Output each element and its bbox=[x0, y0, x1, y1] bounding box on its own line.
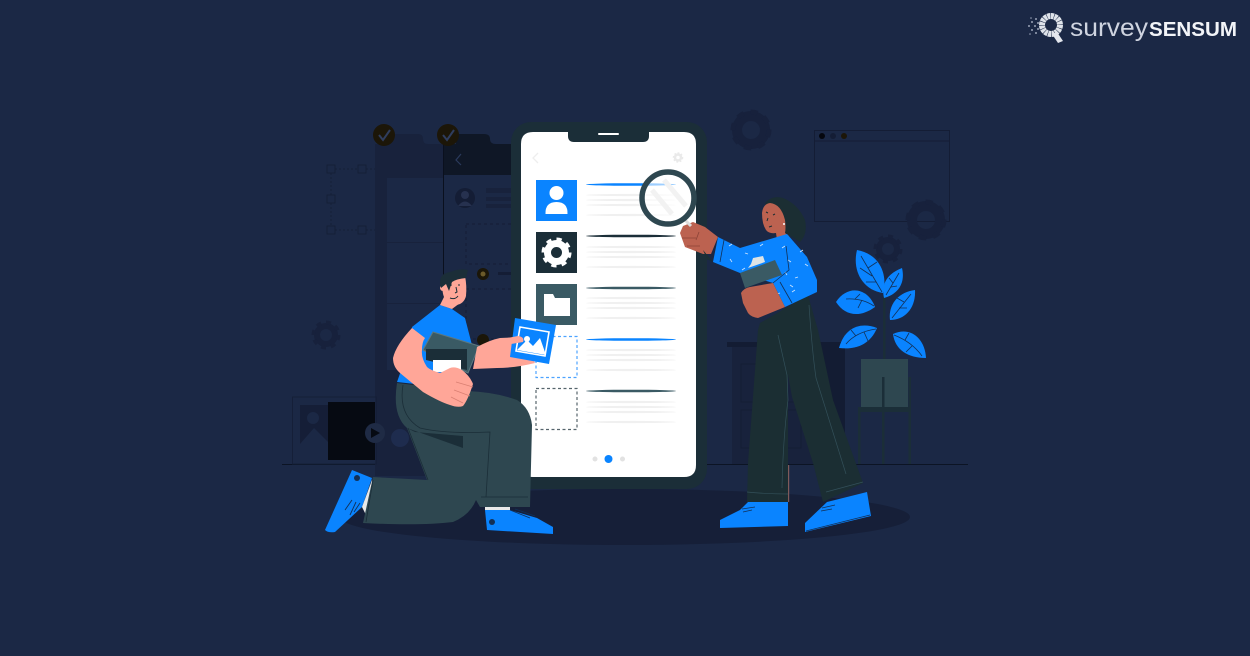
ear bbox=[440, 285, 446, 291]
trousers bbox=[747, 295, 863, 502]
background desk bbox=[727, 342, 845, 464]
list row 3 bbox=[586, 287, 676, 319]
background gear small bbox=[876, 236, 900, 262]
photo card bbox=[510, 318, 556, 364]
back chevron bbox=[533, 153, 538, 163]
shoe details bbox=[345, 500, 535, 518]
list row 5 bbox=[586, 390, 676, 423]
background gear right bbox=[908, 202, 944, 238]
logo mark bbox=[1028, 16, 1063, 43]
neck bbox=[440, 295, 460, 309]
hair bbox=[765, 197, 806, 242]
shoe detail bbox=[742, 505, 870, 531]
raised hand bbox=[680, 222, 718, 254]
t-shirt bbox=[397, 305, 472, 384]
head bbox=[442, 276, 466, 305]
plant bbox=[836, 250, 926, 360]
plant pot and stand bbox=[858, 359, 911, 464]
face and neck bbox=[762, 203, 789, 247]
trouser seams bbox=[366, 385, 528, 522]
trouser seams bbox=[747, 305, 863, 494]
raised hand fingers bbox=[682, 232, 700, 246]
background phone left bbox=[375, 134, 443, 476]
check badge left bbox=[373, 124, 395, 146]
clipboard bbox=[740, 260, 782, 288]
trousers bbox=[363, 383, 532, 524]
check badge right bbox=[437, 124, 459, 146]
phone body bbox=[511, 122, 707, 489]
clipboard clip bbox=[748, 256, 765, 268]
tablet bbox=[423, 332, 479, 373]
cuff bbox=[703, 250, 713, 262]
phone screen bbox=[521, 132, 696, 477]
man figure bbox=[325, 269, 556, 534]
list row 1 bbox=[586, 183, 676, 216]
sweater pattern bbox=[729, 244, 808, 294]
arm holding tablet bbox=[393, 328, 473, 407]
facial features bbox=[450, 284, 459, 299]
icon tile: folder bbox=[536, 284, 577, 325]
sleeve folds bbox=[720, 240, 792, 303]
dashed placeholder blue bbox=[536, 336, 577, 378]
phone speaker bbox=[598, 133, 619, 135]
background gear top bbox=[733, 112, 769, 148]
logo bbox=[1028, 14, 1237, 43]
list row 4 bbox=[586, 338, 676, 371]
logo wordmark: survey bbox=[1070, 14, 1149, 42]
woman figure bbox=[680, 197, 871, 532]
background gear left bbox=[314, 322, 338, 348]
logo: SENSUM bbox=[1149, 19, 1237, 41]
background phone right bbox=[443, 134, 513, 464]
fingers over card bbox=[502, 336, 523, 345]
front shoe bbox=[485, 510, 553, 534]
leaves bbox=[836, 250, 926, 358]
hair bbox=[440, 269, 468, 291]
ground line bbox=[282, 464, 968, 465]
skin at ankle bbox=[788, 465, 789, 502]
settings icon small bbox=[674, 153, 682, 162]
sweater bbox=[713, 234, 817, 307]
back shoe bbox=[325, 470, 372, 532]
forearm reaching bbox=[473, 337, 535, 369]
background flow diagram bbox=[327, 165, 375, 234]
list row 2 bbox=[586, 235, 676, 268]
pagination dots bbox=[592, 455, 625, 463]
background browser window bbox=[814, 130, 950, 222]
white sheet bbox=[433, 360, 461, 372]
floor shadow bbox=[340, 489, 910, 545]
dashed placeholder grey bbox=[536, 388, 577, 430]
phone bbox=[511, 122, 707, 489]
magnifier bbox=[642, 172, 694, 226]
finger lines bbox=[451, 382, 473, 403]
plant stem bbox=[883, 295, 886, 360]
left shoe bbox=[720, 502, 788, 528]
leaf veins bbox=[846, 256, 922, 356]
lower hand bbox=[741, 283, 785, 318]
icon tile: user bbox=[536, 180, 577, 221]
earring bbox=[783, 223, 785, 225]
dark card bbox=[426, 349, 467, 370]
icon tile: gear bbox=[536, 232, 577, 273]
trouser shadow bbox=[407, 428, 463, 448]
facial features bbox=[766, 212, 775, 227]
right shoe bbox=[805, 492, 871, 532]
background media frame bbox=[292, 397, 385, 464]
